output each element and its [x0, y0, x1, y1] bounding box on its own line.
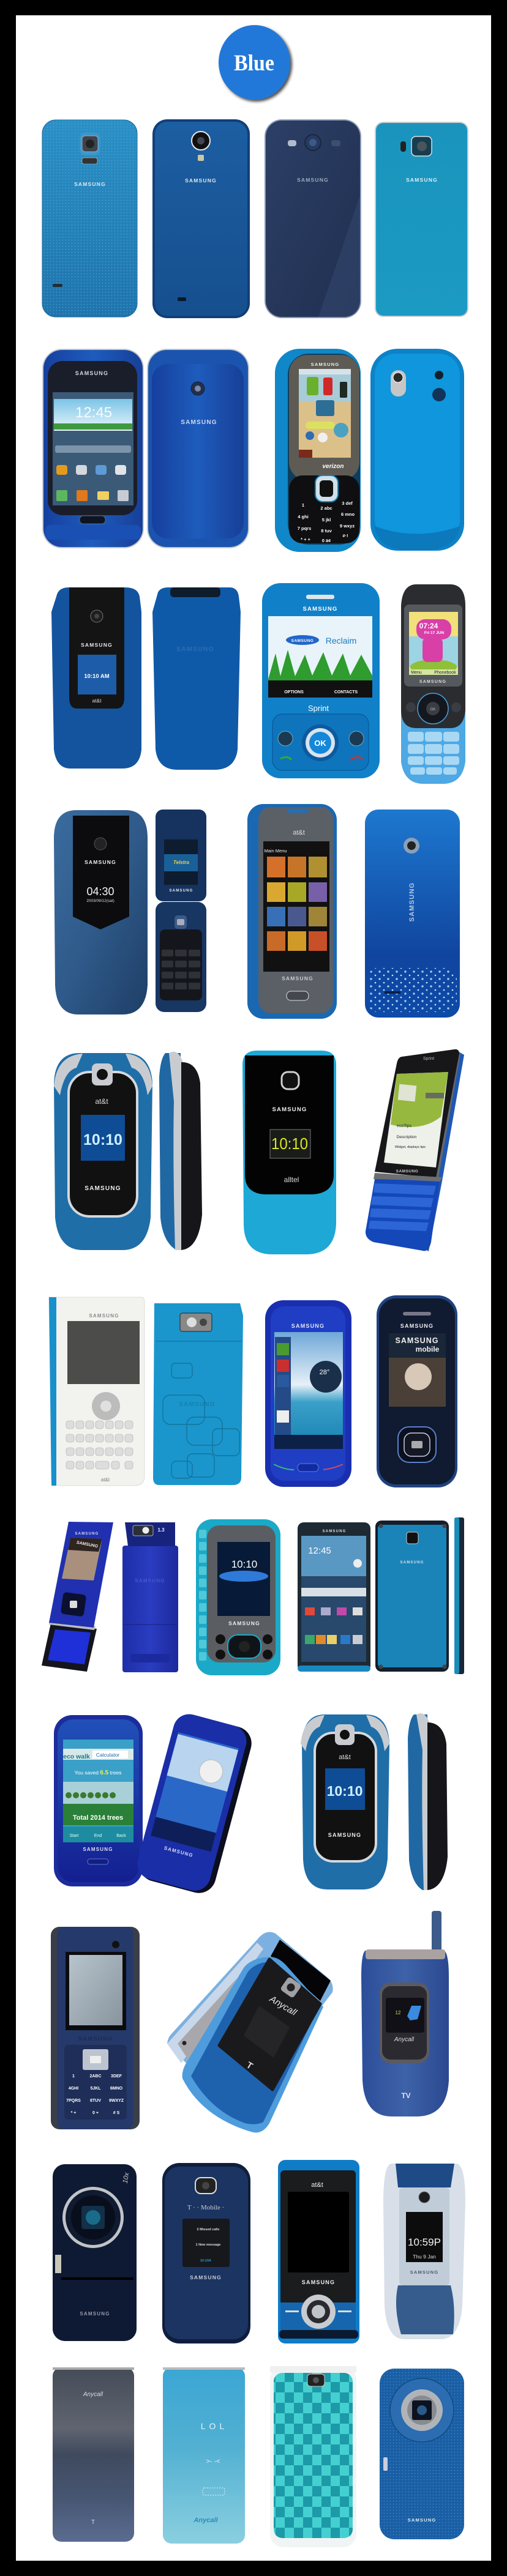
row 9 phone: rugged candybar: 6MNO [110, 2086, 123, 2091]
row 2 phone: Verizon front: 8 tuv [321, 528, 332, 534]
row 9 phone: rugged candybar: 8TUV [90, 2099, 101, 2103]
row 8 phone: at&t flip front (repeat): at&t [339, 1754, 351, 1761]
row 4 phone: flip closed: SAMSUNG [85, 859, 116, 865]
row 11 phone: Anycall slate flip [53, 2367, 134, 2542]
row 10 phone: Galaxy S4 Zoom: SAMSUNG [80, 2311, 110, 2317]
row 2 phone: Verizon front: * + + [301, 537, 311, 542]
row 1 phone: S4 back: SAMSUNG [185, 177, 217, 184]
row 7 phone: S4 Active back [375, 1521, 449, 1672]
row 3 phone: Sprint Reclaim: OPTIONS [284, 690, 304, 694]
row 6 phone: white QWERTY front: at&t [101, 1477, 110, 1483]
row 10 phone: T-Mobile flip: T · · Mobile · [187, 2204, 224, 2211]
row 7 phone: slider back: 1.3 [157, 1527, 165, 1533]
row 11 phone: Anycall LOL cyan flip [163, 2367, 245, 2544]
row 3 phone: Sprint Reclaim [262, 583, 380, 778]
row 9 phone: Anycall tilted flip: T [244, 2060, 255, 2072]
row 3 phone: slider: 07:24 [419, 622, 438, 630]
row 4 phone: flip closed: 04:30 [86, 885, 115, 898]
row 10 phone: T-Mobile flip: 2 Missed calls [197, 2228, 219, 2232]
row 2 phone: Verizon front: 9 wxyz [340, 523, 355, 529]
row 3 phone: flip back [152, 587, 241, 770]
row 8 phone: Blue Earth eco walk: End [94, 1834, 102, 1838]
row 5 phone: tilted Sprint QWERTY: Description [397, 1135, 417, 1139]
row 7 phone: tilted slider: SAMSUNG [75, 1532, 99, 1536]
row 11 phone: Anycall slate flip: T [91, 2519, 95, 2526]
row 5 phone: alltel: SAMSUNG [272, 1106, 307, 1113]
row 8 phone: Blue Earth tilted [133, 1711, 255, 1897]
row 2 phone: Music front: 12:45 [75, 404, 112, 421]
row 2 phone: Verizon front: 1 [302, 502, 304, 508]
row 3 phone: slider: OK [430, 708, 435, 712]
row 8 phone: at&t flip front (repeat) [301, 1714, 389, 1889]
row 6 phone: Blue Earth touch: 28° [320, 1369, 329, 1376]
row 10 phone: Galaxy S4 Zoom: 10x [122, 2172, 131, 2184]
row 10 phone: T-Mobile flip [162, 2163, 250, 2343]
row 2 phone: Music front [42, 349, 144, 548]
row 5 phone: tilted Sprint QWERTY: ecoTips [397, 1124, 412, 1128]
row 3 phone: Sprint Reclaim: Reclaim [326, 636, 356, 646]
row 9 phone: rugged candybar: 0 + [92, 2111, 99, 2115]
row 3 phone: at&t flip front: SAMSUNG [81, 642, 113, 648]
heading badge: Blue [219, 25, 290, 100]
row 3 phone: Sprint Reclaim: SAMSUNG [291, 639, 314, 643]
row 1 phone: S5 back [42, 120, 137, 317]
row 7 phone: S4 Active back: SAMSUNG [400, 1561, 424, 1565]
row 1 phone: Alpha back: SAMSUNG [406, 177, 438, 183]
row 11 phone: Anycall LOL cyan flip: Anycall [193, 2517, 219, 2524]
row 9 phone: rugged candybar: 2ABC [89, 2074, 102, 2079]
row 9 phone: TV flip with antenna: TV [401, 2091, 411, 2100]
row 2 phone: Music front: SAMSUNG [75, 370, 108, 376]
row 3 phone: Sprint Reclaim: SAMSUNG [303, 606, 337, 612]
row 4 phone: flip open Telstra [156, 810, 206, 1012]
row 8 phone: Blue Earth eco walk: Start [70, 1834, 78, 1838]
row 3 phone: at&t flip front: at&t [92, 698, 102, 704]
row 3 phone: flip back: SAMSUNG [176, 646, 214, 653]
row 4 phone: flip open Telstra: Telstra [173, 860, 190, 865]
row 5 phone: tilted Sprint QWERTY: Widget, displays tips [395, 1145, 426, 1149]
row 2 phone: Verizon back [370, 349, 464, 551]
row 3 phone: Sprint Reclaim: CONTACTS [334, 690, 358, 694]
row 11 phone: Galaxy K Zoom [380, 2369, 464, 2539]
row 8 phone: Blue Earth eco walk: You saved 6.5 trees [75, 1770, 121, 1776]
row 6 phone: white QWERTY front: SAMSUNG [89, 1313, 119, 1319]
row 2 phone: Verizon front [275, 349, 361, 552]
row 4 phone: at&t touch front [247, 804, 337, 1019]
row 5 phone: alltel: 10:10 [271, 1134, 308, 1153]
row 9 phone: rugged candybar: 4GHI [69, 2086, 78, 2091]
row 9 phone: TV flip with antenna [361, 1911, 449, 2116]
row 9 phone: rugged candybar: # S [113, 2111, 120, 2115]
row 7 phone: slider back [122, 1522, 178, 1672]
row 10 phone: silver navy flip: Thu 9 Jan [413, 2254, 436, 2260]
row 11 phone: Anycall LOL cyan flip: LOL [201, 2421, 228, 2431]
row 2 phone: Verizon front: 0 ä¢ [322, 538, 331, 543]
row 9 phone: rugged candybar: SAMSUNG [78, 2036, 113, 2042]
row 5 phone: at&t flip front: SAMSUNG [85, 1185, 121, 1192]
row 2 phone: Verizon front: 5 jkl [322, 517, 331, 523]
row 5 phone: alltel [242, 1051, 336, 1254]
row 4 phone: back with dots: SAMSUNG [408, 882, 416, 921]
row 2 phone: Music back [147, 349, 249, 548]
row 10 phone: silver navy flip [383, 2164, 465, 2339]
row 9 phone: Anycall tilted flip [167, 1932, 333, 2132]
row 9 phone: TV flip with antenna: 12 [396, 2010, 401, 2016]
row 8 phone: at&t flip front (repeat): SAMSUNG [328, 1832, 361, 1838]
row 8 phone: Blue Earth eco walk: eco walk [63, 1753, 90, 1760]
row 4 phone: flip closed [54, 810, 148, 1014]
row 7 phone: tilted slider: SAMSUNG [76, 1541, 99, 1549]
row 6 phone: cyan back with squares [153, 1303, 243, 1485]
row 8 phone: Blue Earth eco walk: Calculator [96, 1752, 119, 1758]
row 6 phone: cyan back with squares: SAMSUNG [179, 1401, 216, 1408]
row 3 phone: slider: Phonebook [434, 671, 456, 675]
row 4 phone: flip open Telstra: SAMSUNG [169, 889, 193, 893]
row 3 phone: slider: Fri 17 JUN [424, 631, 444, 635]
row 2 phone: Verizon front: 4 ghi [298, 514, 309, 519]
row 9 phone: TV flip with antenna: Anycall [394, 2036, 415, 2043]
row 10 phone: at&t slider: SAMSUNG [302, 2279, 335, 2285]
row 3 phone: Sprint Reclaim: Sprint [308, 704, 329, 713]
row 6 phone: Blue Earth touch [265, 1300, 351, 1487]
row 7 phone: cyan side keys: SAMSUNG [228, 1620, 260, 1626]
row 2 phone: Verizon front: verizon [322, 463, 344, 470]
row 10 phone: Galaxy S4 Zoom [53, 2164, 137, 2341]
row 7 phone: S4 Active front: SAMSUNG [322, 1530, 347, 1533]
row 5 phone: flip side view [159, 1052, 202, 1250]
row 4 phone: back with dots [365, 810, 460, 1018]
row 7 phone: tilted slider [42, 1522, 113, 1672]
row 4 phone: at&t touch front: SAMSUNG [282, 975, 314, 981]
row 11 phone: Anycall slate flip: Anycall [83, 2391, 103, 2398]
row 5 phone: at&t flip front: 10:10 [83, 1131, 122, 1148]
row 5 phone: tilted Sprint QWERTY: SAMSUNG [396, 1169, 418, 1174]
row 10 phone: silver navy flip: 10:59P [408, 2236, 441, 2248]
row 4 phone: flip closed: 2003/09/12(sat) [86, 899, 115, 903]
row 1 phone: S4 back [152, 119, 250, 318]
row 10 phone: at&t slider [278, 2160, 359, 2343]
row 10 phone: at&t slider: at&t [311, 2181, 323, 2189]
row 11 phone: teal checker flip [270, 2366, 356, 2547]
row 3 phone: slider [401, 584, 465, 784]
row 10 phone: silver navy flip: SAMSUNG [410, 2269, 438, 2275]
row 2 phone: Verizon front: 7 pqrs [298, 526, 311, 531]
row 3 phone: slider: SAMSUNG [419, 680, 446, 684]
row 10 phone: T-Mobile flip: 1 New message [196, 2243, 220, 2247]
row 9 phone: rugged candybar: 9WXYZ [109, 2099, 124, 2103]
row 11 phone: Anycall LOL cyan flip: >- -< [206, 2458, 220, 2465]
row 7 phone: cyan side keys [196, 1519, 280, 1675]
row 4 phone: at&t touch front: Main Menu [264, 848, 287, 854]
row 9 phone: rugged candybar: 5JKL [90, 2086, 101, 2091]
row 10 phone: T-Mobile flip: 10:10A [200, 2259, 211, 2263]
row 1 phone: Alpha back [375, 122, 468, 317]
row 8 phone: Blue Earth eco walk [54, 1715, 143, 1886]
row 1 phone: S3 pebble blue back: SAMSUNG [297, 177, 329, 183]
row 3 phone: slider: Menu [411, 671, 422, 675]
row 7 phone: S4 Active front [298, 1522, 370, 1672]
row 8 phone: Blue Earth eco walk: Back [116, 1834, 126, 1838]
row 2 phone: Verizon front: 6 mno [341, 512, 355, 517]
row 7 phone: S4 Active side [454, 1517, 464, 1674]
row 8 phone: flip side view (repeat) [408, 1713, 448, 1890]
row 9 phone: rugged candybar: * + [71, 2111, 76, 2115]
row 8 phone: Blue Earth tilted: SAMSUNG [163, 1845, 194, 1858]
row 11 phone: Galaxy K Zoom: SAMSUNG [408, 2517, 436, 2523]
row 5 phone: alltel: alltel [284, 1175, 299, 1184]
row 2 phone: Verizon front: #·! [342, 533, 348, 538]
row 6 phone: slider SAMSUNG mobile [377, 1295, 457, 1487]
row 9 phone: rugged candybar: 1 [72, 2074, 75, 2079]
row 1 phone: S3 pebble blue back [265, 119, 361, 318]
row 3 phone: Sprint Reclaim: OK [314, 739, 326, 748]
row 4 phone: at&t touch front: at&t [293, 829, 305, 836]
row 5 phone: at&t flip front [54, 1053, 152, 1250]
row 2 phone: Music back: SAMSUNG [181, 419, 217, 426]
row 5 phone: at&t flip front: at&t [95, 1097, 108, 1106]
row 2 phone: Verizon front: 3 def [342, 501, 353, 506]
row 9 phone: rugged candybar: 3DEF [111, 2074, 122, 2079]
row 9 phone: Anycall tilted flip: Anycall [267, 1993, 299, 2018]
row 1 phone: S5 back: SAMSUNG [74, 181, 106, 187]
row 3 phone: at&t flip front [51, 587, 141, 769]
row 2 phone: Verizon front: SAMSUNG [311, 362, 339, 367]
row 8 phone: Blue Earth eco walk: SAMSUNG [83, 1847, 113, 1852]
row 5 phone: tilted Sprint QWERTY [366, 1049, 464, 1251]
row 5 phone: tilted Sprint QWERTY: Sprint [423, 1057, 434, 1061]
row 8 phone: at&t flip front (repeat): 10:10 [327, 1783, 362, 1799]
row 7 phone: cyan side keys: 10:10 [231, 1558, 257, 1570]
row 6 phone: slider SAMSUNG mobile: mobile [416, 1345, 440, 1353]
row 6 phone: white QWERTY front [49, 1297, 145, 1486]
row 9 phone: rugged candybar: 7PQRS [66, 2099, 81, 2103]
row 6 phone: slider SAMSUNG mobile: SAMSUNG [400, 1323, 434, 1329]
row 8 phone: Blue Earth eco walk: Total 2014 trees [73, 1814, 123, 1822]
row 7 phone: slider back: SAMSUNG [135, 1578, 165, 1584]
row 2 phone: Verizon front: 2 abc [320, 505, 332, 511]
row 9 phone: rugged candybar [51, 1927, 140, 2129]
row 6 phone: slider SAMSUNG mobile: SAMSUNG [396, 1336, 438, 1345]
row 10 phone: T-Mobile flip: SAMSUNG [190, 2274, 222, 2280]
row 6 phone: Blue Earth touch: SAMSUNG [291, 1323, 325, 1329]
row 7 phone: S4 Active front: 12:45 [308, 1546, 331, 1556]
heading badge: Blue: Blue [234, 51, 274, 76]
row 3 phone: at&t flip front: 10:10 AM [84, 673, 110, 680]
